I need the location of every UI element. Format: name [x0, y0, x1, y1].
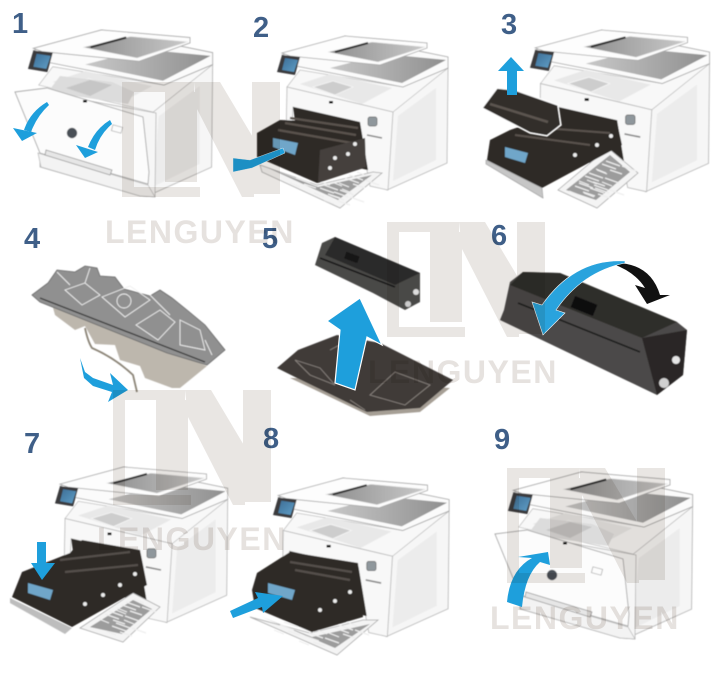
step number 7: 7	[24, 428, 40, 460]
removed toner cartridge	[482, 88, 561, 136]
packaging tray	[277, 335, 453, 416]
panel: step 3 lift out cartridge	[482, 9, 710, 208]
toner cartridge	[315, 237, 420, 310]
step number 1: 1	[12, 8, 28, 40]
step number 5: 5	[262, 223, 278, 255]
step number 3: 3	[501, 9, 517, 41]
printer with drawer extended	[10, 467, 228, 642]
step number 8: 8	[263, 423, 279, 455]
panel: step 4 packaging tray	[24, 223, 225, 402]
icon: curved blue arrow	[80, 358, 128, 402]
printer with open door and toner drawer	[257, 36, 448, 208]
watermark: LN logo and LENGUYEN text, lower left	[97, 390, 287, 557]
watermark: LN logo and LENGUYEN text, centre	[368, 222, 558, 390]
icon: blue arrow pointing left	[233, 148, 285, 172]
watermark: LN logo and LENGUYEN text, lower right	[490, 468, 680, 636]
icon: blue arrow right	[76, 120, 112, 158]
panel: step 2 pull out the drawer	[233, 12, 448, 208]
printer with drawer and door open	[486, 30, 710, 208]
panel: step 8 push drawer in	[230, 423, 449, 655]
icon: blue arrow pointing right	[230, 592, 283, 618]
watermark: LN logo and LENGUYEN text, centre: LENGUYEN	[368, 354, 558, 390]
watermark: LN logo and LENGUYEN text, lower left: LENGUYEN	[97, 521, 287, 557]
icon: blue arrow pointing up	[498, 57, 524, 95]
panel: step 9 close the door	[494, 424, 693, 639]
step number 6: 6	[491, 220, 507, 252]
packaging tray with pull strip	[32, 266, 225, 392]
panel: step 5 remove cartridge from tray	[262, 223, 453, 416]
icon: blue arrow left	[13, 102, 49, 141]
printer with drawer sliding in	[250, 478, 449, 655]
watermark: LN logo and LENGUYEN text, lower right: LENGUYEN	[490, 600, 680, 636]
panel: step 6 rock the cartridge	[491, 220, 687, 395]
watermark: LN logo and LENGUYEN text, top left	[105, 82, 295, 250]
icon: blue arrow pointing down	[31, 542, 55, 580]
watermark: LN logo and LENGUYEN text, top left: LENGUYEN	[105, 214, 295, 250]
panel: step 1 open the door	[12, 8, 213, 197]
icon: large blue up arrow	[327, 298, 382, 390]
toner cartridge	[500, 272, 687, 395]
icon: blue curved arrow	[532, 261, 625, 335]
step number 2: 2	[253, 12, 269, 44]
icon: curved blue arrow	[507, 552, 550, 607]
icon: black curved arrow	[613, 263, 670, 304]
step number 9: 9	[494, 424, 510, 456]
printer with door closing	[495, 472, 693, 639]
panel: step 7 reinsert cartridge	[10, 428, 228, 642]
step number 4: 4	[24, 223, 40, 255]
printer with door opening	[15, 30, 213, 197]
